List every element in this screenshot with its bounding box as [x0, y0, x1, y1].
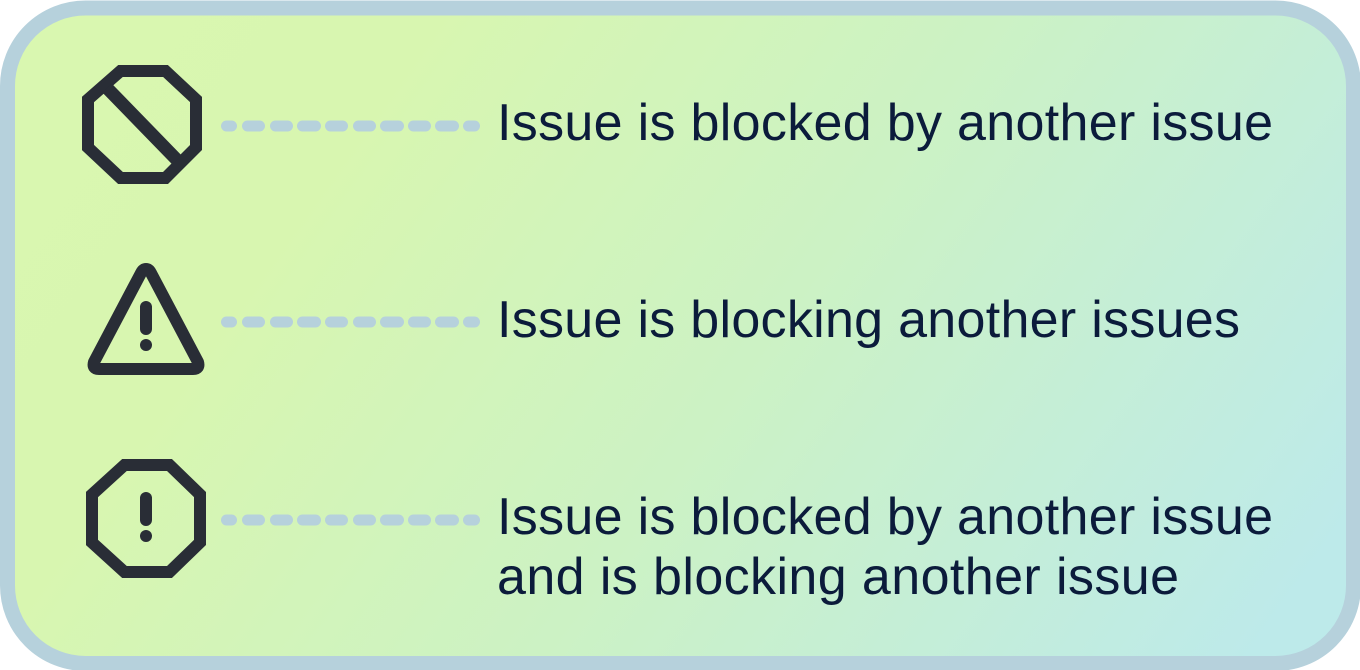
label: blocked and blocking: and is blocking another issue	[497, 548, 1179, 606]
label: blocked and blocking: Issue is blocked by another issue	[497, 488, 1273, 546]
label: blocked and blocking	[497, 488, 1273, 606]
row: blocking	[94, 269, 1240, 369]
icon: warning triangle	[94, 269, 198, 369]
label: blocked: Issue is blocked by another issue	[497, 94, 1273, 152]
row: blocked	[88, 71, 1273, 178]
row: blocked and blocking	[92, 465, 1273, 606]
connector: dashed line	[221, 514, 480, 526]
label: blocking: Issue is blocking another issues	[497, 291, 1240, 349]
icon: alert octagon	[92, 465, 200, 572]
icon: blocked octagon	[88, 71, 196, 178]
connector: dashed line	[221, 120, 480, 132]
connector: dashed line	[221, 316, 480, 328]
